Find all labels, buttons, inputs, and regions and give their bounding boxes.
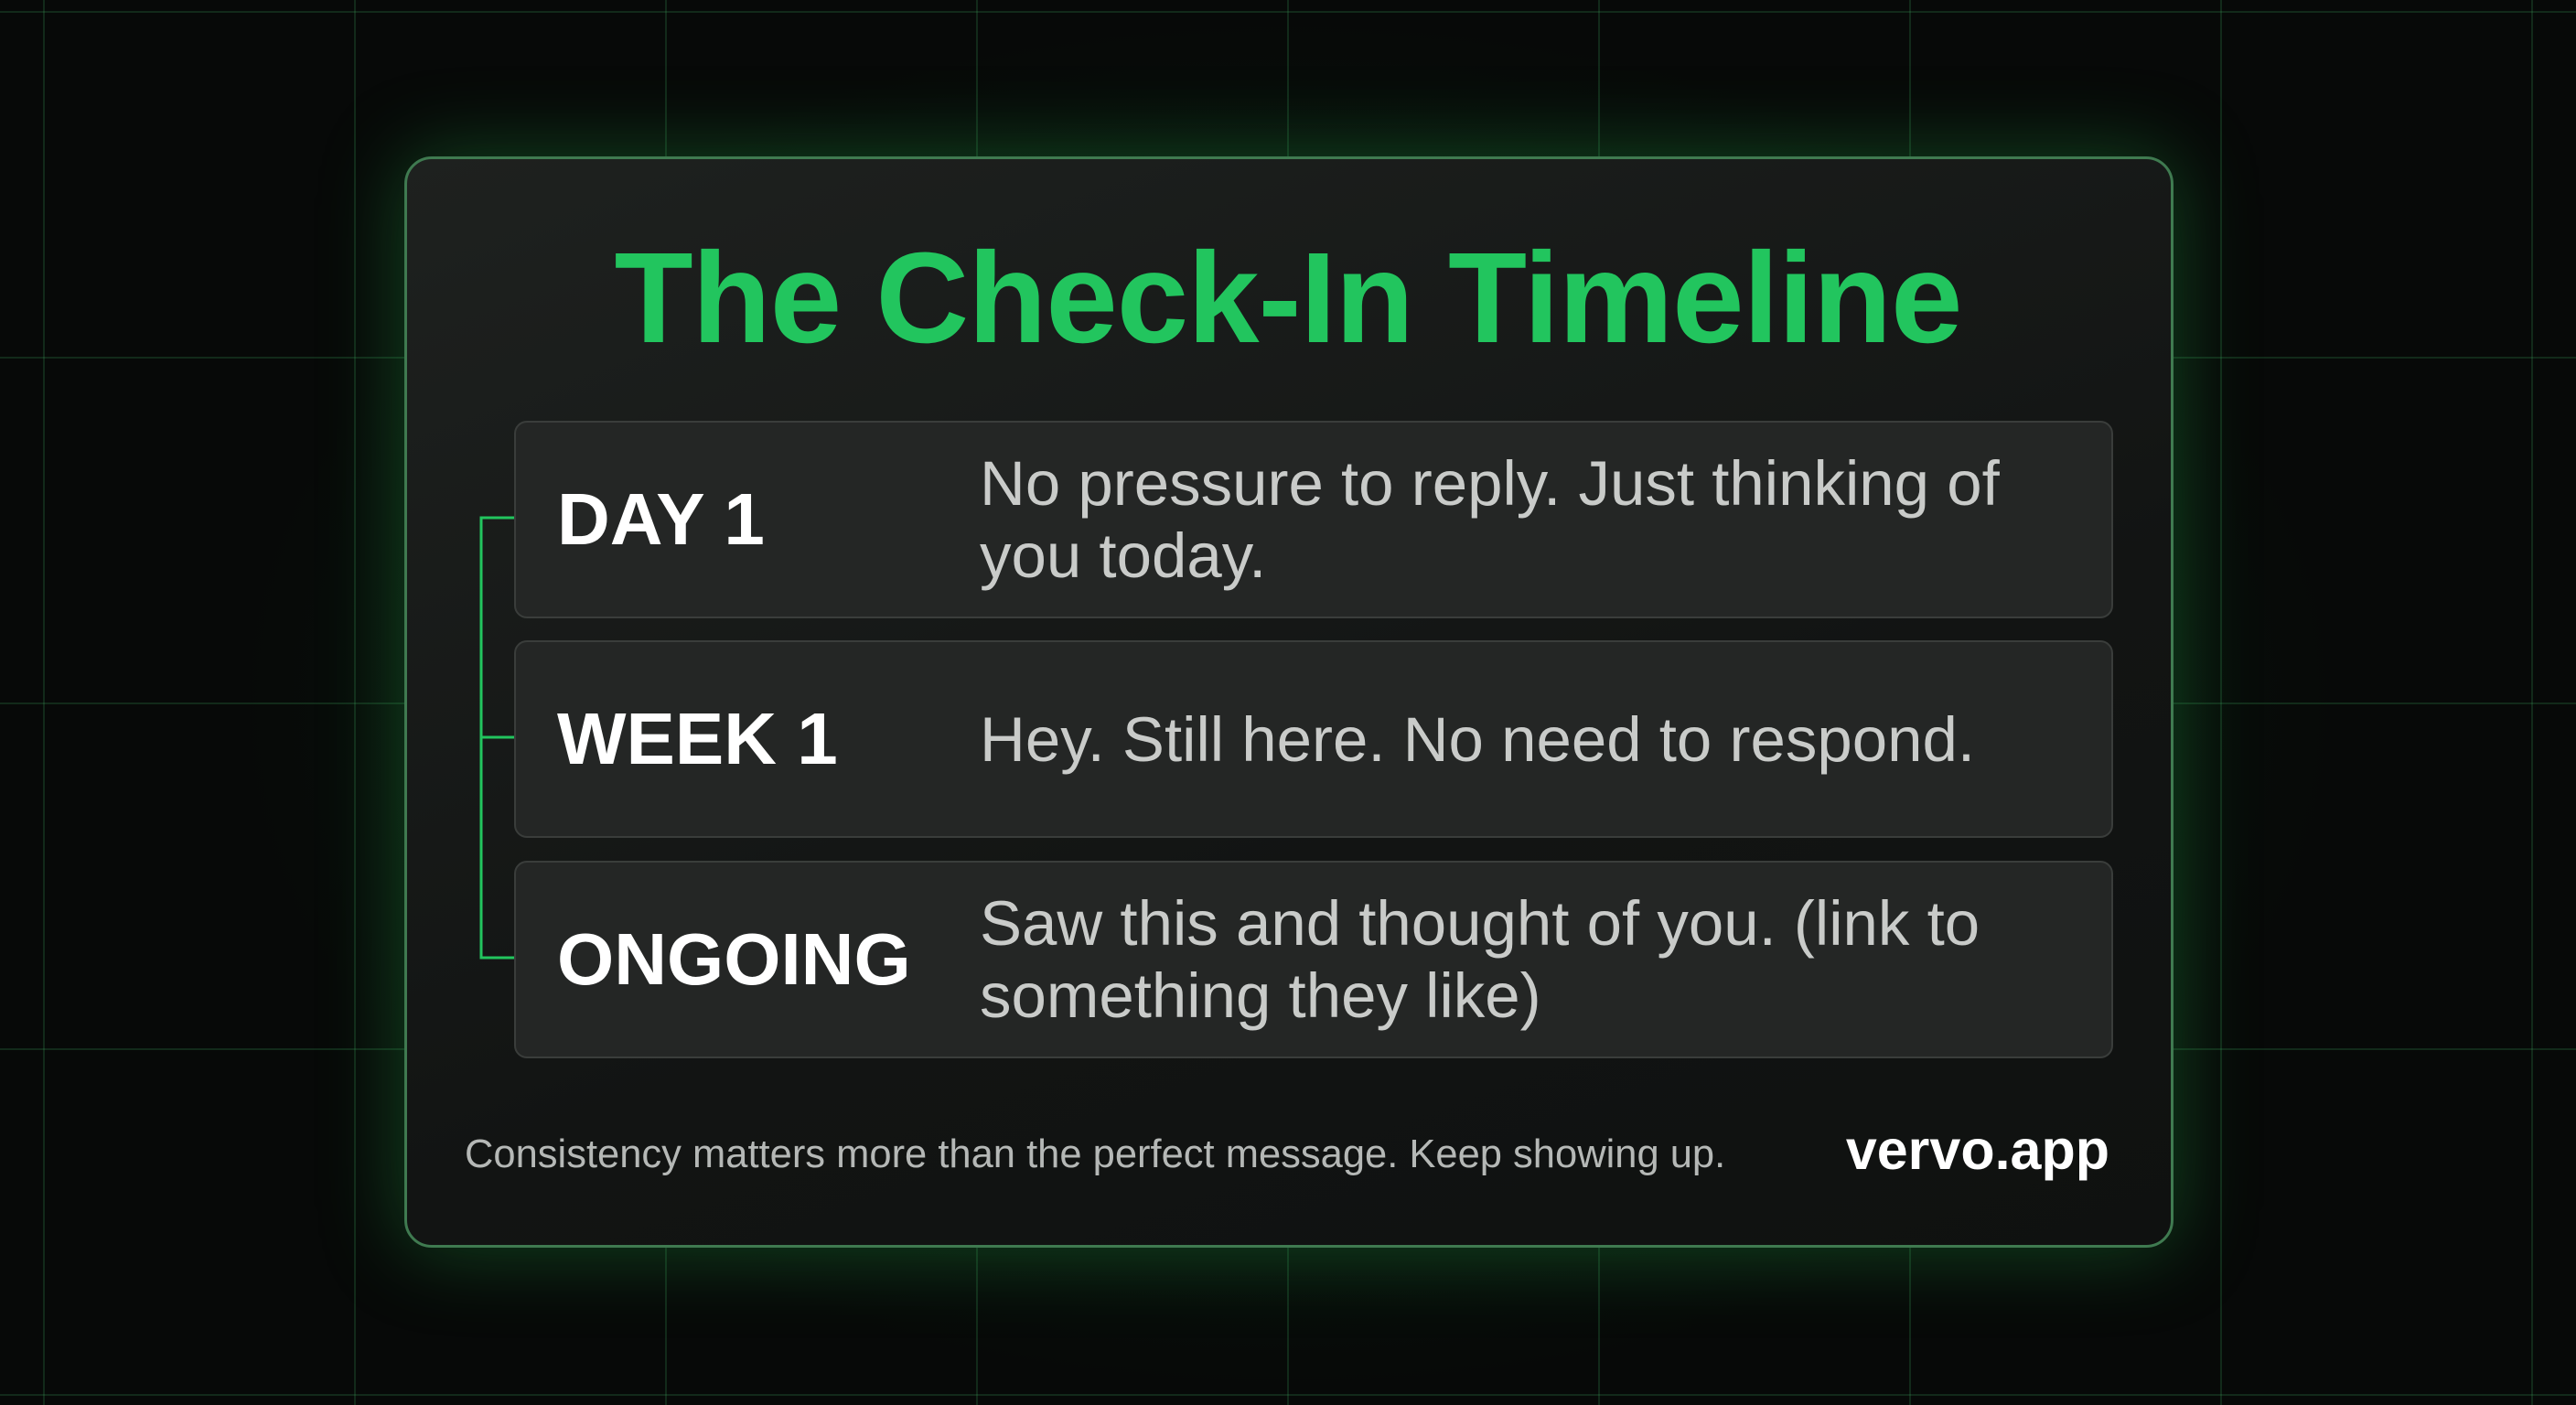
row: week 1	[514, 640, 2113, 838]
row: ongoing: Saw this and thought of you. (link to something they like)	[980, 888, 1980, 1031]
brand: vervo.app	[1846, 1119, 2109, 1181]
row: day 1: No pressure to reply. Just thinking of you today.	[980, 448, 2000, 591]
footer text: Consistency matters more than the perfect message. Keep showing up.	[465, 1132, 1725, 1176]
row: week 1: WEEK 1	[557, 698, 838, 779]
row: ongoing: ONGOING	[557, 918, 911, 1000]
row: week 1: Hey. Still here. No need to respond.	[980, 704, 1975, 774]
row: ongoing	[514, 861, 2113, 1058]
title: The Check-In Timeline	[615, 225, 1961, 370]
row: day 1	[514, 421, 2113, 618]
row: day 1: DAY 1	[557, 478, 765, 560]
card panel	[404, 156, 2174, 1248]
